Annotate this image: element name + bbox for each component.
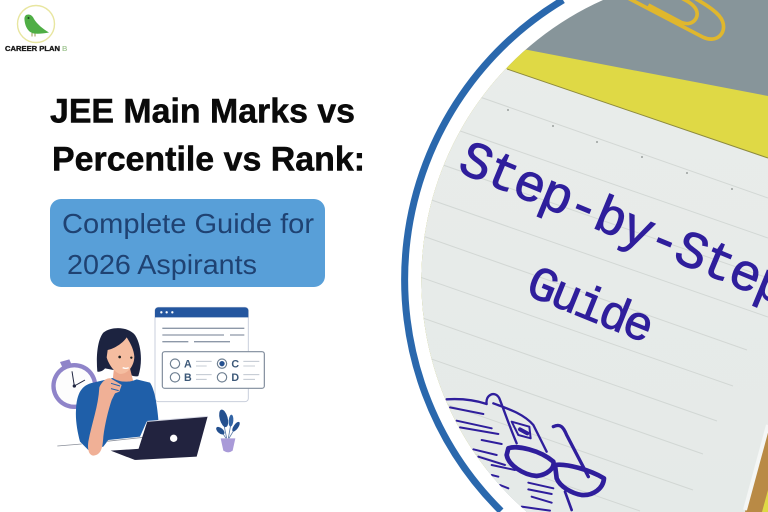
subtitle badge: 2026 Aspirants (67, 249, 257, 280)
desk line (57, 437, 143, 446)
arm and hand (88, 378, 122, 456)
blue circle ring (405, 0, 563, 511)
answer options panel: A (184, 358, 192, 370)
photo: notebook in circle (420, 0, 768, 512)
answer options panel: B (184, 372, 192, 384)
subtitle badge (50, 199, 325, 287)
yellow sheet (420, 33, 768, 470)
illustration: student taking online test (51, 307, 264, 460)
shirt (76, 378, 159, 450)
stopwatch (51, 359, 97, 409)
handwritten heading: Guide (518, 258, 661, 357)
doodle: newspaper and glasses (447, 394, 604, 511)
logo: Career Plan B: CAREER PLAN (5, 44, 60, 53)
title: JEE Main Marks vs (50, 92, 355, 130)
face (107, 337, 134, 374)
paperclip (627, 0, 724, 39)
logo: Career Plan B (5, 6, 68, 53)
laptop (111, 416, 208, 460)
grey desk (420, 0, 768, 512)
ruled lines (420, 76, 768, 511)
title (50, 92, 365, 178)
title: Percentile vs Rank: (52, 140, 365, 178)
answer options panel: C (231, 358, 239, 370)
test window (155, 307, 248, 402)
hair (97, 328, 141, 376)
plant (215, 409, 241, 452)
answer options panel (162, 352, 264, 388)
notebook page (420, 39, 768, 512)
answer options panel: D (231, 372, 239, 384)
neck (113, 368, 133, 384)
logo: Career Plan B: B (62, 44, 68, 53)
brown notebook edge (745, 433, 768, 512)
subtitle badge: Complete Guide for (62, 208, 314, 239)
line dots (507, 109, 733, 190)
person (76, 328, 159, 456)
